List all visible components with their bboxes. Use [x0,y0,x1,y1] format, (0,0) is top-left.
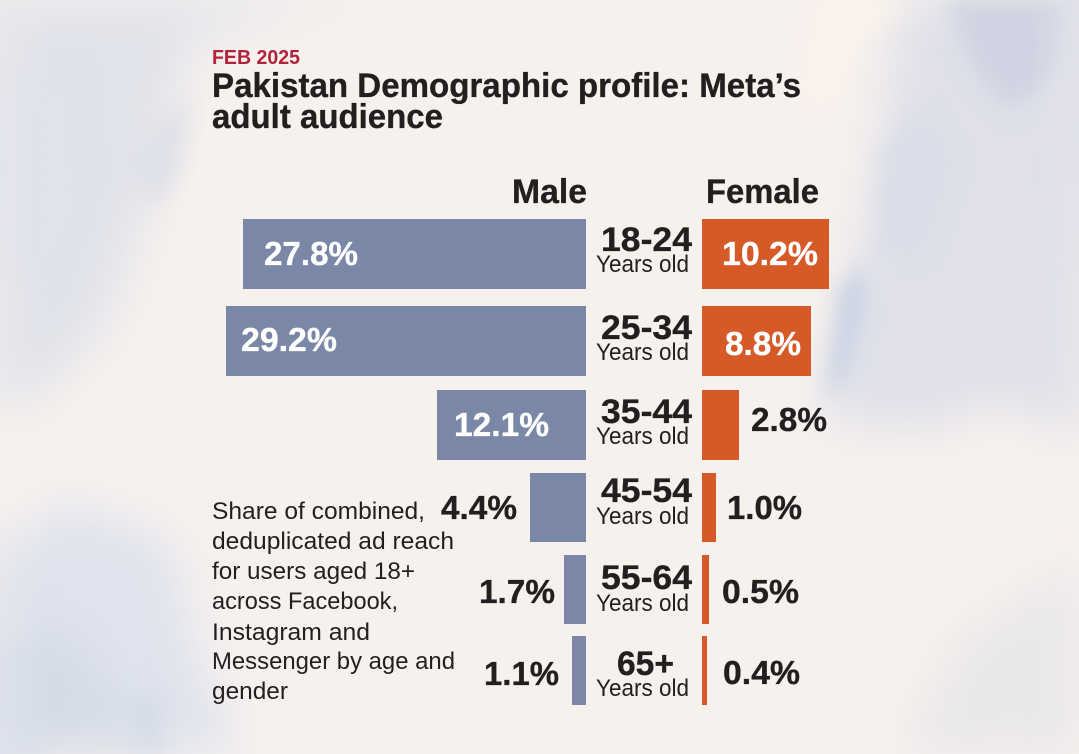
title [212,67,801,136]
description text: Instagram and [212,619,370,646]
age label: 55-64 [601,559,692,597]
description text: for users aged 18+ [212,558,415,585]
age unit: Years old [596,675,689,702]
male value: 1.7% [479,573,555,610]
title: adult audience [212,98,443,136]
female bar 10.2% [702,219,829,289]
female value: 8.8% [725,325,801,362]
age label: 25-34 [601,309,692,347]
female bar 0.5% [702,555,709,624]
heading: Female: Female [706,173,819,211]
description text: deduplicated ad reach [212,528,454,555]
age unit: Years old [596,251,689,278]
description text: Messenger by age and [212,648,455,675]
description text [212,498,455,705]
age unit: Years old [596,590,689,617]
male value: 1.1% [484,655,559,692]
description text: Share of combined, [212,498,425,525]
row: 65+ [484,636,800,705]
row: 35-44 [437,390,827,460]
row: 18-24 [243,219,829,289]
age unit: Years old [596,503,689,530]
description text: gender [212,678,288,705]
age label: 45-54 [601,472,692,510]
description text: across Facebook, [212,588,398,615]
row: 25-34 [226,306,811,376]
female bar 8.8% [702,306,811,376]
age unit: Years old [596,423,689,450]
heading: Male: Male [512,173,587,211]
row: 55-64 [479,555,799,624]
row: 45-54 [441,472,802,542]
female bar 0.4% [702,636,707,705]
male bar 12.1% [437,390,586,460]
date label: FEB 2025 [212,47,300,69]
female bar 2.8% [702,390,739,460]
female value: 10.2% [722,235,818,272]
female value: 1.0% [727,489,802,526]
female bar 1.0% [702,473,716,542]
male bar 29.2% [226,306,586,376]
male value: 27.8% [264,235,358,272]
title: Pakistan Demographic profile: Meta’s [212,67,801,105]
female value: 0.5% [722,573,799,610]
male bar 27.8% [243,219,586,289]
male value: 4.4% [441,489,517,526]
age label: 18-24 [601,221,692,259]
female value: 2.8% [751,401,827,438]
male bar 1.1% [572,636,586,705]
male bar 1.7% [564,555,586,624]
age label: 65+ [617,645,674,683]
age label: 35-44 [601,393,692,431]
male value: 29.2% [241,321,337,358]
male value: 12.1% [454,406,549,443]
age unit: Years old [596,339,689,366]
male bar 4.4% [530,473,586,542]
female value: 0.4% [723,654,800,691]
